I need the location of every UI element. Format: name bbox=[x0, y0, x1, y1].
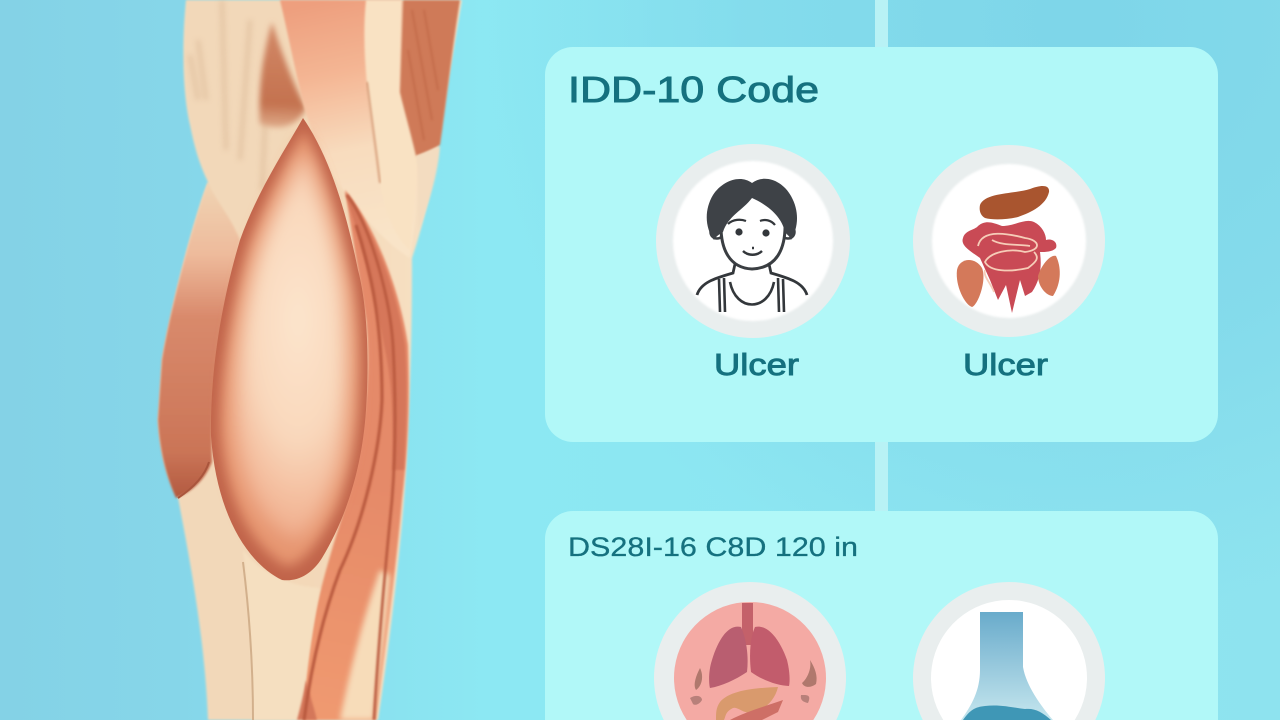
tendon patch beside fibre muscle bbox=[416, 146, 440, 232]
icon: internal organs bbox=[654, 582, 846, 720]
tendon groove line bbox=[367, 82, 380, 183]
face bbox=[721, 195, 785, 269]
panel background bbox=[545, 47, 1218, 442]
calf pale centre bbox=[234, 150, 348, 540]
brows bbox=[728, 220, 775, 225]
central calf muscle bbox=[211, 118, 368, 580]
leg base with tendons bbox=[158, 0, 462, 720]
label: Ulcer right: Ulcer bbox=[963, 347, 1048, 382]
upper dark muscle bbox=[260, 22, 306, 127]
cream lower-left tendon bbox=[243, 550, 320, 720]
intestines bbox=[963, 221, 1056, 313]
connector: middle bbox=[875, 442, 888, 511]
lower cream tendon right bbox=[340, 570, 390, 720]
lungs bbox=[709, 627, 748, 688]
calf mid tone bbox=[221, 130, 360, 566]
top salmon band fading to cream bbox=[280, 0, 418, 258]
dark separation lines bbox=[347, 195, 395, 720]
icon: digestive organs bbox=[913, 145, 1105, 337]
hair bbox=[707, 179, 797, 240]
lateral muscle lower edge bbox=[178, 462, 209, 498]
label: Ulcer left: Ulcer bbox=[714, 347, 799, 382]
dark band beside calf bbox=[345, 192, 407, 470]
icon: flask bbox=[913, 582, 1105, 720]
lateral muscle bbox=[158, 182, 240, 498]
right gland bbox=[1038, 256, 1060, 296]
shoulders bbox=[697, 264, 807, 295]
left gland bbox=[957, 260, 983, 307]
flask water bbox=[963, 705, 1051, 720]
straps and collar bbox=[719, 278, 784, 312]
flask body bbox=[961, 612, 1053, 720]
illustration: leg muscle anatomy bbox=[158, 0, 462, 720]
top right fibre muscle bbox=[400, 0, 460, 156]
heading: DS28I-16 C8D 120 in bbox=[568, 532, 858, 562]
right side muscle strips bbox=[303, 190, 409, 720]
liver bbox=[716, 687, 778, 720]
liver bbox=[980, 186, 1049, 219]
stomach bbox=[730, 700, 783, 720]
panel: lower codes bbox=[545, 511, 1218, 720]
heading: IDD-10 Code bbox=[568, 69, 819, 110]
ears bbox=[710, 226, 724, 238]
upper tendon shading bbox=[190, 0, 268, 190]
small organs bbox=[695, 668, 702, 690]
panel background bbox=[545, 511, 1218, 720]
eyes bbox=[735, 228, 743, 236]
cream tendon strip bbox=[364, 0, 418, 250]
bottom dark triangle bbox=[297, 680, 317, 720]
nose and mouth bbox=[743, 248, 762, 255]
trachea bbox=[742, 603, 753, 645]
calf rim bbox=[211, 118, 368, 580]
connector: top bbox=[875, 0, 888, 47]
panel: IDD-10 Code bbox=[545, 47, 1218, 442]
intestine highlights bbox=[978, 234, 1037, 292]
icon: person bbox=[656, 144, 850, 338]
